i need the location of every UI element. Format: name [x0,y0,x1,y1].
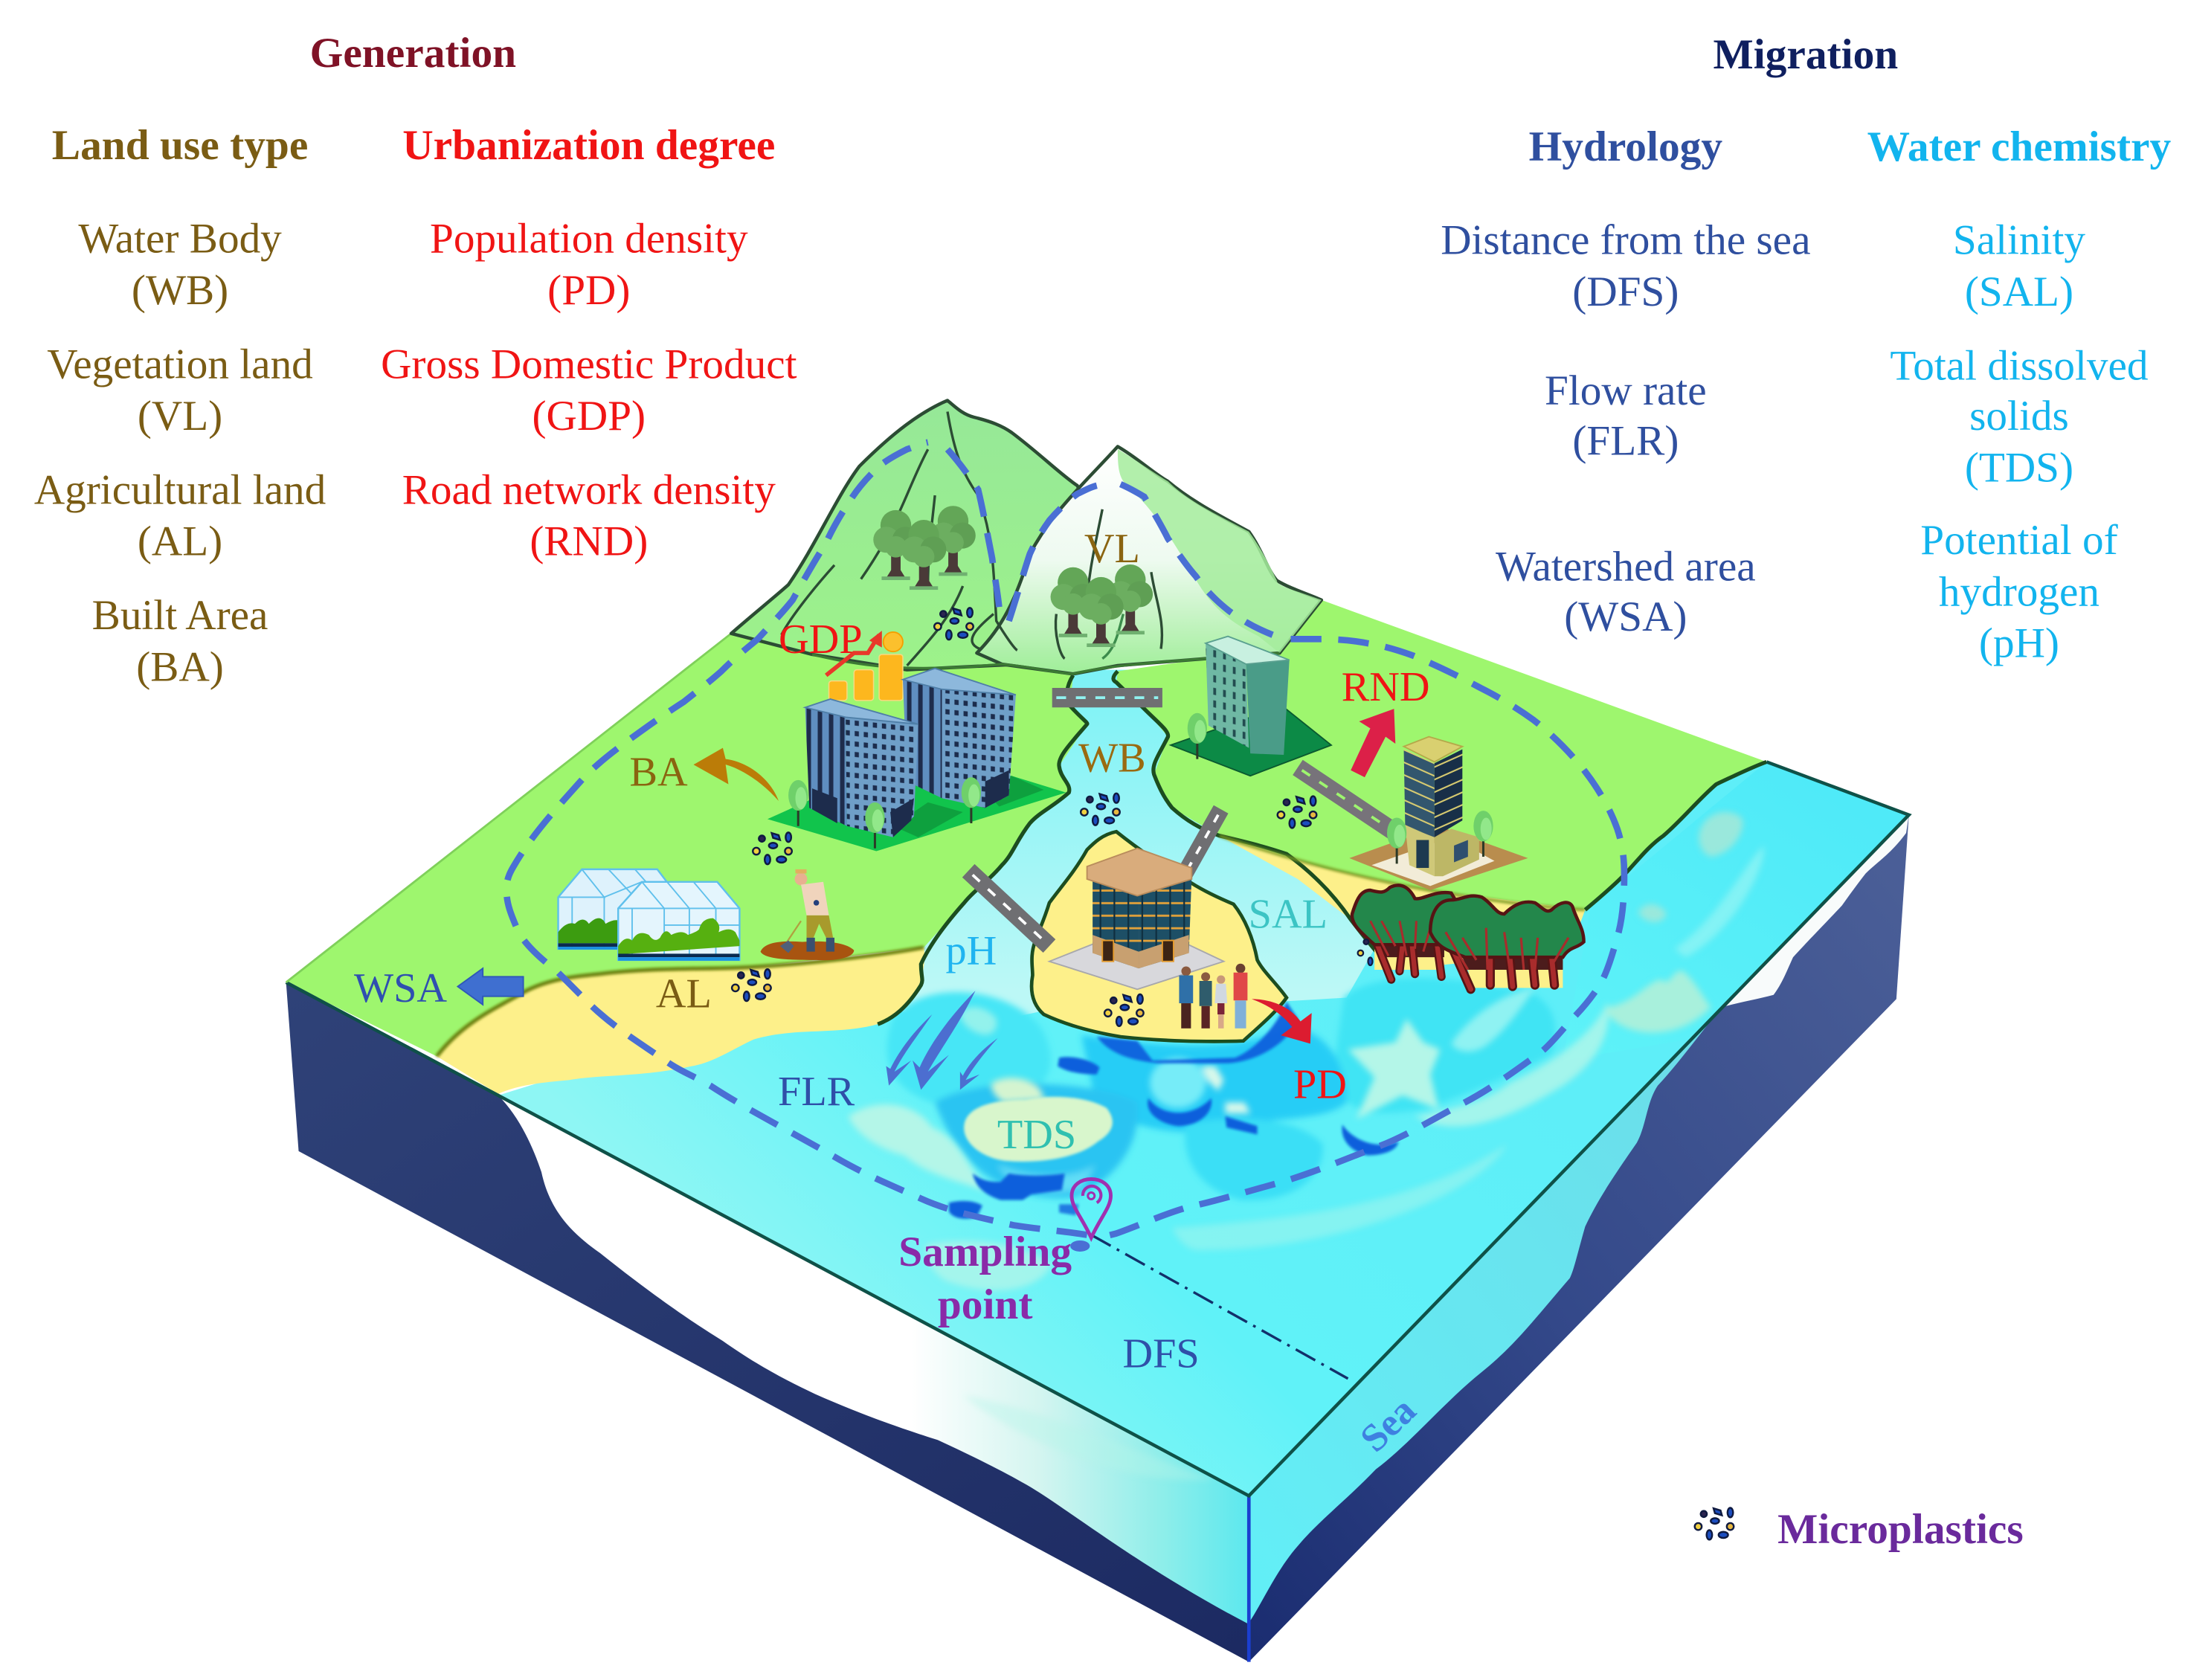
pale water patches [849,812,1764,1480]
column: urbanization degree: (PD) [547,267,630,314]
panel: right side face of the block [1249,815,1909,1662]
panel: right tower on tan platform [1349,737,1528,890]
panel: left towers on green platform [768,669,1066,852]
deep blue water shadows [949,1002,1398,1219]
label: sampling point [898,1229,1072,1328]
map labels: WSA [354,965,447,1011]
map labels: BA [630,749,688,795]
map labels: VL [1084,526,1140,572]
front greenhouse [618,882,739,961]
cyan water zones [887,978,1555,1200]
sand: central island [1032,831,1287,1041]
road: river bridge [1052,688,1162,707]
map labels: DFS [1122,1331,1200,1377]
column: urbanization degree: (GDP) [532,393,646,440]
left mountain [731,400,1118,670]
column: water chemistry [1867,123,2172,667]
column: urbanization degree: (RND) [530,518,648,565]
icon: mangrove forest [1352,885,1584,989]
label: sampling point: Sampling [898,1229,1072,1275]
column: water chemistry: Total dissolved [1890,342,2149,389]
column: land use type: Built Area [92,592,268,639]
column: hydrology: (DFS) [1572,268,1679,315]
column: land use type: (AL) [138,518,222,565]
small shadow below pin [1070,1240,1090,1252]
panel: sea surface [498,670,1909,1496]
legend: microplastics: Microplastics [1777,1506,2024,1553]
front mangrove [1430,896,1584,989]
back mangrove [1352,885,1468,979]
map labels: FLR [778,1069,855,1115]
icon: gold coins and growth arrow [826,631,903,701]
heading: Generation: Generation [310,30,516,77]
map labels: PD [1293,1062,1347,1108]
heading: Migration: Migration [1714,31,1898,78]
panel: block top edges [286,634,1909,1496]
map labels: GDP [779,617,863,663]
right mountain flank [1118,449,1322,653]
column: land use type: Water Body [78,216,282,263]
icon: sampling point pin [1072,1179,1111,1238]
coast lines [437,671,1766,1056]
column: water chemistry: (pH) [1979,620,2059,667]
back tower [903,669,1016,808]
column: land use type [34,122,326,691]
map labels [354,526,1430,1377]
road: to central island [1183,809,1221,876]
road: left diagonal [968,871,1049,946]
column: urbanization degree: Gross Domestic Product [381,341,797,387]
sand: right coast [1220,836,1585,970]
column: water chemistry: Potential of [1920,517,2119,564]
column: hydrology: Flow rate [1545,367,1707,414]
column: land use type: Land use type [52,122,308,169]
column: hydrology: Distance from the sea [1441,216,1810,263]
column: urbanization degree: Road network density [402,466,776,513]
water strip on right face [1249,1003,1726,1623]
icon: group of people [1179,964,1247,1029]
road: right diagonal to tower [1298,767,1403,837]
ridge lines [782,411,1280,674]
trees on left mountain [873,506,976,590]
map labels: pH [945,927,997,973]
column: land use type: (BA) [136,644,224,691]
column: water chemistry: solids [1969,393,2069,440]
column: water chemistry: Salinity [1953,216,2085,263]
column: land use type: Vegetation land [47,341,313,387]
column: hydrology [1441,123,1810,640]
arrow: population density [1252,999,1312,1043]
right mountain [976,446,1322,674]
column: water chemistry: Water chemistry [1867,123,2172,170]
column: water chemistry: hydrogen [1939,568,2099,615]
column: urbanization degree [381,122,797,565]
column: urbanization degree: Population density [430,216,748,263]
river water [900,670,1374,1026]
panel: teal tower on dark platform [1171,637,1331,776]
icon: greenhouses [559,869,739,961]
front tower [805,699,918,837]
panel: central tan tower [1049,849,1223,989]
column: water chemistry: (TDS) [1965,444,2073,491]
TDS shoal [964,1097,1113,1162]
column: land use type: Agricultural land [34,466,326,513]
column: land use type: (VL) [138,393,222,440]
arrows: flow rate [886,991,998,1090]
arrow: built area [694,748,779,801]
back greenhouse [559,869,675,950]
distance from sea dash-dot line [1091,1235,1348,1379]
microplastics clusters [732,608,1316,1026]
watershed boundary dashed line [506,442,1624,1239]
map labels: AL [656,971,712,1017]
label: sea: Sea [1352,1388,1424,1461]
column: hydrology: Hydrology [1529,123,1722,170]
column: urbanization degree: Urbanization degree [402,122,775,169]
column: land use type: (WB) [132,267,228,314]
label: sampling point: point [938,1281,1032,1328]
arrow: watershed area [457,968,524,1005]
map labels: TDS [997,1112,1076,1158]
column: hydrology: Watershed area [1496,544,1756,590]
panel: left side face of the block [286,982,1249,1662]
panel: land surface with river banks [286,600,1766,1094]
white foam on right face [1726,815,1909,1006]
map labels: SAL [1249,892,1328,938]
trees on right mountain [1051,564,1153,647]
foam strip on left face [498,1095,1249,1624]
panel: mountains [731,400,1322,674]
column: hydrology: (FLR) [1572,418,1679,465]
map labels: WB [1078,736,1146,782]
icon: farmer on soil [761,869,854,960]
arrow: road network density [1351,709,1395,777]
column: hydrology: (WSA) [1564,593,1687,640]
partial microplastics at mangrove [1358,939,1372,965]
sand: left coast [437,947,924,1094]
column: water chemistry: (SAL) [1965,268,2073,315]
map labels: RND [1342,664,1430,710]
